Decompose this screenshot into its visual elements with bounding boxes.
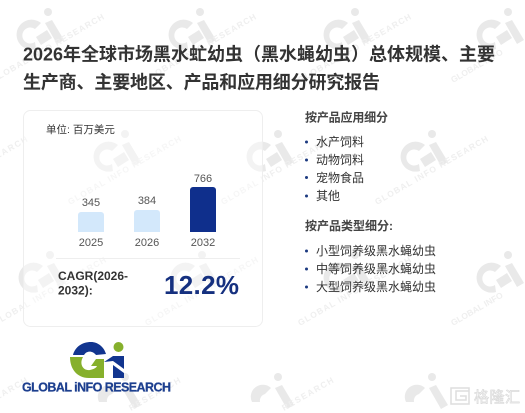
list: by application — [305, 110, 388, 203]
CAGR label: CAGR(2026- — [58, 269, 128, 283]
list: by application: 动物饲料 — [316, 153, 364, 167]
watermark pattern: GLOBAL INFO RESEARCH — [143, 255, 260, 328]
bar chart: 345 — [82, 197, 100, 209]
list: by product type: 大型饲养级黑水蝇幼虫 — [316, 279, 436, 294]
bar chart: 2025 — [79, 237, 103, 249]
bar chart: 384 — [138, 195, 156, 207]
bar chart — [78, 173, 216, 249]
panel: market size card — [24, 110, 262, 326]
watermark pattern: GLOBAL INFO RESEARCH — [141, 12, 258, 85]
logo: 格隆汇 watermark: 格隆汇 — [474, 389, 520, 406]
list: by application: 按产品应用细分 — [305, 110, 388, 124]
CAGR value: 12.2% — [164, 270, 239, 300]
list: by application: 其他 — [316, 189, 340, 203]
watermark pattern: GLOBAL INFO RESEARCH — [296, 255, 413, 328]
bar chart: 2032 — [191, 237, 215, 249]
logo: Global Info Research: GLOBAL iNFO RESEARCH — [22, 380, 171, 394]
watermark pattern: RESEARCH — [280, 375, 335, 413]
watermark pattern: GLOBAL INFO — [449, 47, 505, 85]
logo: Global Info Research — [22, 342, 171, 394]
CAGR label: 2032): — [58, 284, 93, 298]
list: by application: 宠物食品 — [316, 170, 364, 185]
title — [23, 44, 495, 92]
unit label: 单位: 百万美元 — [46, 123, 115, 136]
list: by product type: 按产品类型细分: — [305, 218, 393, 233]
title: 生产商、主要地区、产品和应用细分研究报告 — [23, 72, 380, 92]
list: by product type — [305, 218, 436, 294]
list: by product type: 中等饲养级黑水蝇幼虫 — [316, 261, 436, 276]
logo: 格隆汇 watermark — [451, 388, 520, 406]
bar chart: 2026 — [135, 237, 159, 249]
list: by product type: 小型饲养级黑水蝇幼虫 — [316, 243, 436, 258]
title: 2026年全球市场黑水虻幼虫（黑水蝇幼虫）总体规模、主要 — [23, 44, 495, 64]
watermark pattern: RESEARCH — [127, 375, 182, 413]
list: by application: 水产饲料 — [316, 135, 364, 149]
watermark pattern: GLOBAL INFO RESEARCH — [296, 12, 413, 85]
watermark pattern: GLOBAL INFO RESEARCH — [66, 134, 183, 207]
watermark pattern: GLOBAL INFO RESEARCH — [373, 134, 490, 207]
bar chart: 766 — [194, 173, 212, 185]
watermark pattern: GLOBAL INFO — [449, 290, 505, 328]
watermark pattern: GLOBAL INFO RESEARCH — [219, 134, 336, 207]
